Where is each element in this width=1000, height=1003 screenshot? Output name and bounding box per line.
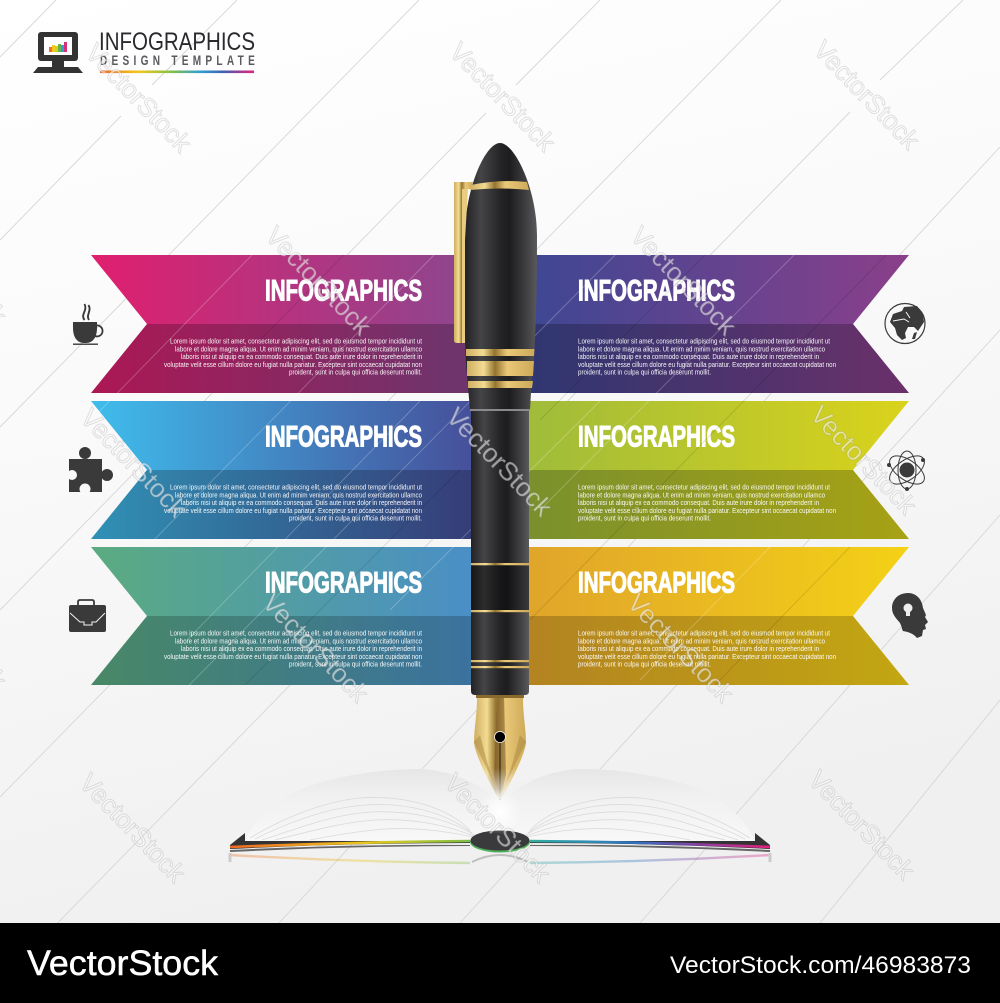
watermarks: VectorStock [79, 37, 198, 159]
banner 2 right: voluptate velit esse cillum dolore eu fugiat nulla pariatur. Excepteur sint occaecat cupidatat non [578, 506, 836, 515]
watermarks: VectorStock [74, 402, 193, 524]
banner 2 left [91, 401, 500, 539]
banner 1 right: voluptate velit esse cillum dolore eu fugiat nulla pariatur. Excepteur sint occaecat cupidatat non [578, 360, 836, 369]
banner 1 left: voluptate velit esse cillum dolore eu fugiat nulla pariatur. Excepteur sint occaecat cupidatat non [164, 360, 422, 369]
banner 1 left [91, 255, 500, 393]
banner 1 right: labore et dolore magna aliqua. Ut enim ad minim veniam, quis nostrud exercitation ullamco [578, 344, 825, 353]
banner 1 left: INFOGRAPHICS [265, 274, 422, 308]
footer url: VectorStock.com/46983873 [670, 952, 971, 979]
banner 3 left: INFOGRAPHICS [265, 566, 422, 600]
watermarks: VectorStock [807, 34, 926, 156]
pen clip [454, 182, 473, 343]
left column banners [91, 255, 500, 685]
watermarks: VectorStock [256, 587, 375, 709]
banner 3 right: voluptate velit esse cillum dolore eu fugiat nulla pariatur. Excepteur sint occaecat cupidatat non [578, 652, 836, 661]
watermarks: VectorStock [443, 36, 562, 158]
logo subtitle: DESIGN TEMPLATE [100, 52, 255, 68]
banner 2 right: Lorem ipsum dolor sit amet, consectetur adipiscing elit, sed do eiusmod tempor incididunt ut [578, 482, 830, 492]
banner 3 left [91, 547, 500, 685]
open book [230, 769, 770, 863]
banner 2 right: labore et dolore magna aliqua. Ut enim ad minim veniam, quis nostrud exercitation ullamco [578, 490, 825, 499]
watermarks: VectorStock [621, 587, 740, 709]
icon: globe [885, 304, 925, 344]
silver ring [470, 409, 530, 411]
watermarks: VectorStock [73, 767, 192, 889]
reflection [230, 853, 770, 863]
banner 1 right: INFOGRAPHICS [578, 274, 735, 308]
watermarks: VectorStock [440, 401, 559, 523]
banner 2 right: proident, sunt in culpa qui officia deserunt mollit. [578, 514, 711, 523]
banner 2 left: voluptate velit esse cillum dolore eu fugiat nulla pariatur. Excepteur sint occaecat cupidatat non [164, 506, 422, 515]
banner overlay lines [91, 255, 886, 760]
banner 1 left: Lorem ipsum dolor sit amet, consectetur adipiscing elit, sed do eiusmod tempor incididunt ut [170, 336, 422, 346]
icon: coffee cup [73, 304, 103, 345]
banner 1 right: proident, sunt in culpa qui officia deserunt mollit. [578, 368, 711, 377]
icon: head with light bulb [892, 593, 928, 638]
footer logo: VectorStock [27, 944, 219, 983]
banner 2 left: proident, sunt in culpa qui officia deserunt mollit. [289, 514, 422, 523]
banner 3 right: laboris nisi ut aliquip ex ea commodo consequat. Duis aute irure dolor in reprehenderit in [578, 644, 819, 653]
pen cap [454, 143, 537, 411]
pen nib [474, 698, 526, 833]
icon: puzzle piece [67, 447, 113, 494]
banner 1 left: laboris nisi ut aliquip ex ea commodo consequat. Duis aute irure dolor in reprehenderit in [181, 352, 422, 361]
cap gold top band [470, 181, 529, 190]
banner 1 left: labore et dolore magna aliqua. Ut enim ad minim veniam, quis nostrud exercitation ullamco [175, 344, 422, 353]
book cover [230, 833, 770, 849]
banner 3 right: INFOGRAPHICS [578, 566, 735, 600]
banner 2 left: laboris nisi ut aliquip ex ea commodo consequat. Duis aute irure dolor in reprehenderit in [181, 498, 422, 507]
banner 1 left: proident, sunt in culpa qui officia deserunt mollit. [289, 368, 422, 377]
fountain pen [454, 143, 537, 834]
banner 2 left: INFOGRAPHICS [265, 420, 422, 454]
banner 3 right: Lorem ipsum dolor sit amet, consectetur adipiscing elit, sed do eiusmod tempor incididunt ut [578, 628, 830, 638]
banner 3 right: labore et dolore magna aliqua. Ut enim ad minim veniam, quis nostrud exercitation ullamco [578, 636, 825, 645]
banner 1 right: Lorem ipsum dolor sit amet, consectetur adipiscing elit, sed do eiusmod tempor incididunt ut [578, 336, 830, 346]
icon: monitor [33, 32, 83, 73]
banner 3 right: proident, sunt in culpa qui officia deserunt mollit. [578, 660, 711, 669]
banner 2 left: Lorem ipsum dolor sit amet, consectetur adipiscing elit, sed do eiusmod tempor incididunt ut [170, 482, 422, 492]
banner 3 left: voluptate velit esse cillum dolore eu fugiat nulla pariatur. Excepteur sint occaecat cupidatat non [164, 652, 422, 661]
banner 1 right: laboris nisi ut aliquip ex ea commodo consequat. Duis aute irure dolor in reprehenderit in [578, 352, 819, 361]
banner 2 right: laboris nisi ut aliquip ex ea commodo consequat. Duis aute irure dolor in reprehenderit in [578, 498, 819, 507]
right column banners [500, 255, 909, 685]
cap gold rings [466, 349, 534, 356]
footer bar [0, 923, 1000, 1003]
banner 1 right [500, 255, 909, 393]
watermarks: VectorStock [438, 767, 557, 889]
logo [33, 28, 255, 73]
watermarks: VectorStock [259, 220, 378, 342]
pen barrel [471, 408, 529, 698]
spine [470, 830, 530, 852]
banner 2 left: labore et dolore magna aliqua. Ut enim ad minim veniam, quis nostrud exercitation ullamco [175, 490, 422, 499]
book pages [245, 769, 755, 842]
banner 3 left: Lorem ipsum dolor sit amet, consectetur adipiscing elit, sed do eiusmod tempor incididunt ut [170, 628, 422, 638]
banner 2 right [500, 401, 909, 539]
watermarks: VectorStock [802, 764, 921, 886]
banner 3 right [500, 547, 909, 685]
logo title: INFOGRAPHICS [99, 28, 255, 56]
logo rainbow line [100, 70, 254, 73]
banner 3 left: labore et dolore magna aliqua. Ut enim ad minim veniam, quis nostrud exercitation ullamco [175, 636, 422, 645]
banner 2 right: INFOGRAPHICS [578, 420, 735, 454]
watermarks: VectorStock [624, 220, 743, 342]
banner 3 left: proident, sunt in culpa qui officia deserunt mollit. [289, 660, 422, 669]
banner 3 left: laboris nisi ut aliquip ex ea commodo consequat. Duis aute irure dolor in reprehenderit in [181, 644, 422, 653]
watermarks: VectorStock [804, 399, 923, 521]
icon: atom [885, 450, 929, 490]
page lines [250, 797, 750, 840]
rainbow edge [230, 841, 770, 847]
icon: briefcase [69, 600, 106, 632]
